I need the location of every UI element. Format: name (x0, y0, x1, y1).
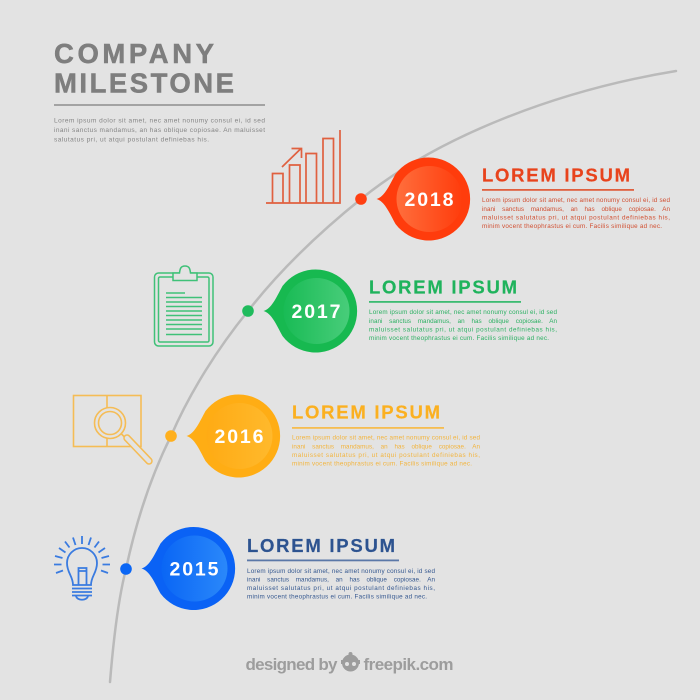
text block 2015: maluisset salutatus pri, ut atqui postulant definiebas his, (247, 585, 435, 592)
bubble 2017: 2017 (292, 301, 340, 323)
milestone marker 2018 (355, 193, 367, 205)
bubble 2018 (376, 158, 470, 240)
text block 2015 (247, 535, 435, 600)
title: MILESTONE (54, 68, 234, 98)
text block 2015: Lorem ipsum dolor sit amet, nec amet nonumy consul ei, id sed (247, 568, 435, 575)
milestone marker 2016 (165, 430, 177, 442)
text block 2015: minim vocent theophrastus ei cum. Facilis similique ad nec. (247, 594, 427, 600)
title rule (54, 104, 265, 106)
text block 2018: Lorem ipsum dolor sit amet, nec amet nonumy consul ei, id sed (482, 197, 670, 204)
text block 2016: LOREM IPSUM (292, 402, 440, 422)
watermark: designed by (246, 655, 338, 674)
milestone marker 2017 (242, 305, 254, 317)
icon: bar chart (266, 130, 340, 203)
text block 2018: LOREM IPSUM (482, 164, 630, 186)
intro text: salutatus pri, ut atqui postulant definiebas his. (54, 136, 209, 144)
icon: freepik mascot (341, 652, 360, 672)
text block 2015: LOREM IPSUM (247, 535, 395, 556)
text block 2017: Lorem ipsum dolor sit amet, nec amet nonumy consul ei, id sed (369, 309, 557, 316)
watermark (246, 652, 454, 674)
bubble 2016 (186, 394, 280, 478)
text block 2017: minim vocent theophrastus ei cum. Facilis similique ad nec. (369, 335, 549, 342)
bubble 2015 (142, 527, 235, 610)
text block 2018: inani sanctus mandamus, an has oblique copiosae. An (482, 206, 670, 213)
intro text (54, 118, 265, 144)
watermark: freepik.com (364, 655, 454, 674)
text block 2017: LOREM IPSUM (369, 276, 517, 298)
text block 2016: maluisset salutatus pri, ut atqui postulant definiebas his, (292, 452, 480, 459)
text block 2017: inani sanctus mandamus, an has oblique copiosae. An (369, 318, 557, 325)
bubble 2018: 2018 (404, 189, 454, 211)
bubble 2015: 2015 (170, 558, 219, 580)
intro text: Lorem ipsum dolor sit amet, nec amet nonumy consul ei, id sed (54, 118, 265, 124)
text block 2016: inani sanctus mandamus, an has oblique copiosae. An (292, 444, 480, 450)
icon: magnifier over map (74, 396, 149, 461)
icon: clipboard (154, 266, 213, 346)
text block 2016: minim vocent theophrastus ei cum. Facilis similique ad nec. (292, 460, 472, 468)
text block 2015: inani sanctus mandamus, an has oblique copiosae. An (247, 576, 435, 584)
text block 2018: maluisset salutatus pri, ut atqui postulant definiebas his, (482, 214, 670, 222)
text block 2016 (292, 402, 480, 468)
milestone marker 2015 (120, 563, 132, 575)
bubble 2017 (264, 270, 357, 352)
title: COMPANY (54, 38, 214, 69)
text block 2016: Lorem ipsum dolor sit amet, nec amet nonumy consul ei, id sed (292, 434, 480, 442)
text block 2017 (369, 276, 557, 342)
icon: light bulb (54, 536, 110, 600)
intro text: inani sanctus mandamus, an has oblique copiosae. An maluisset (54, 127, 265, 134)
bubble 2016: 2016 (214, 426, 264, 448)
timeline curve (110, 71, 676, 682)
text block 2018 (482, 164, 670, 230)
title (54, 38, 234, 98)
text block 2018: minim vocent theophrastus ei cum. Facilis similique ad nec. (482, 223, 662, 230)
text block 2017: maluisset salutatus pri, ut atqui postulant definiebas his, (369, 326, 557, 334)
